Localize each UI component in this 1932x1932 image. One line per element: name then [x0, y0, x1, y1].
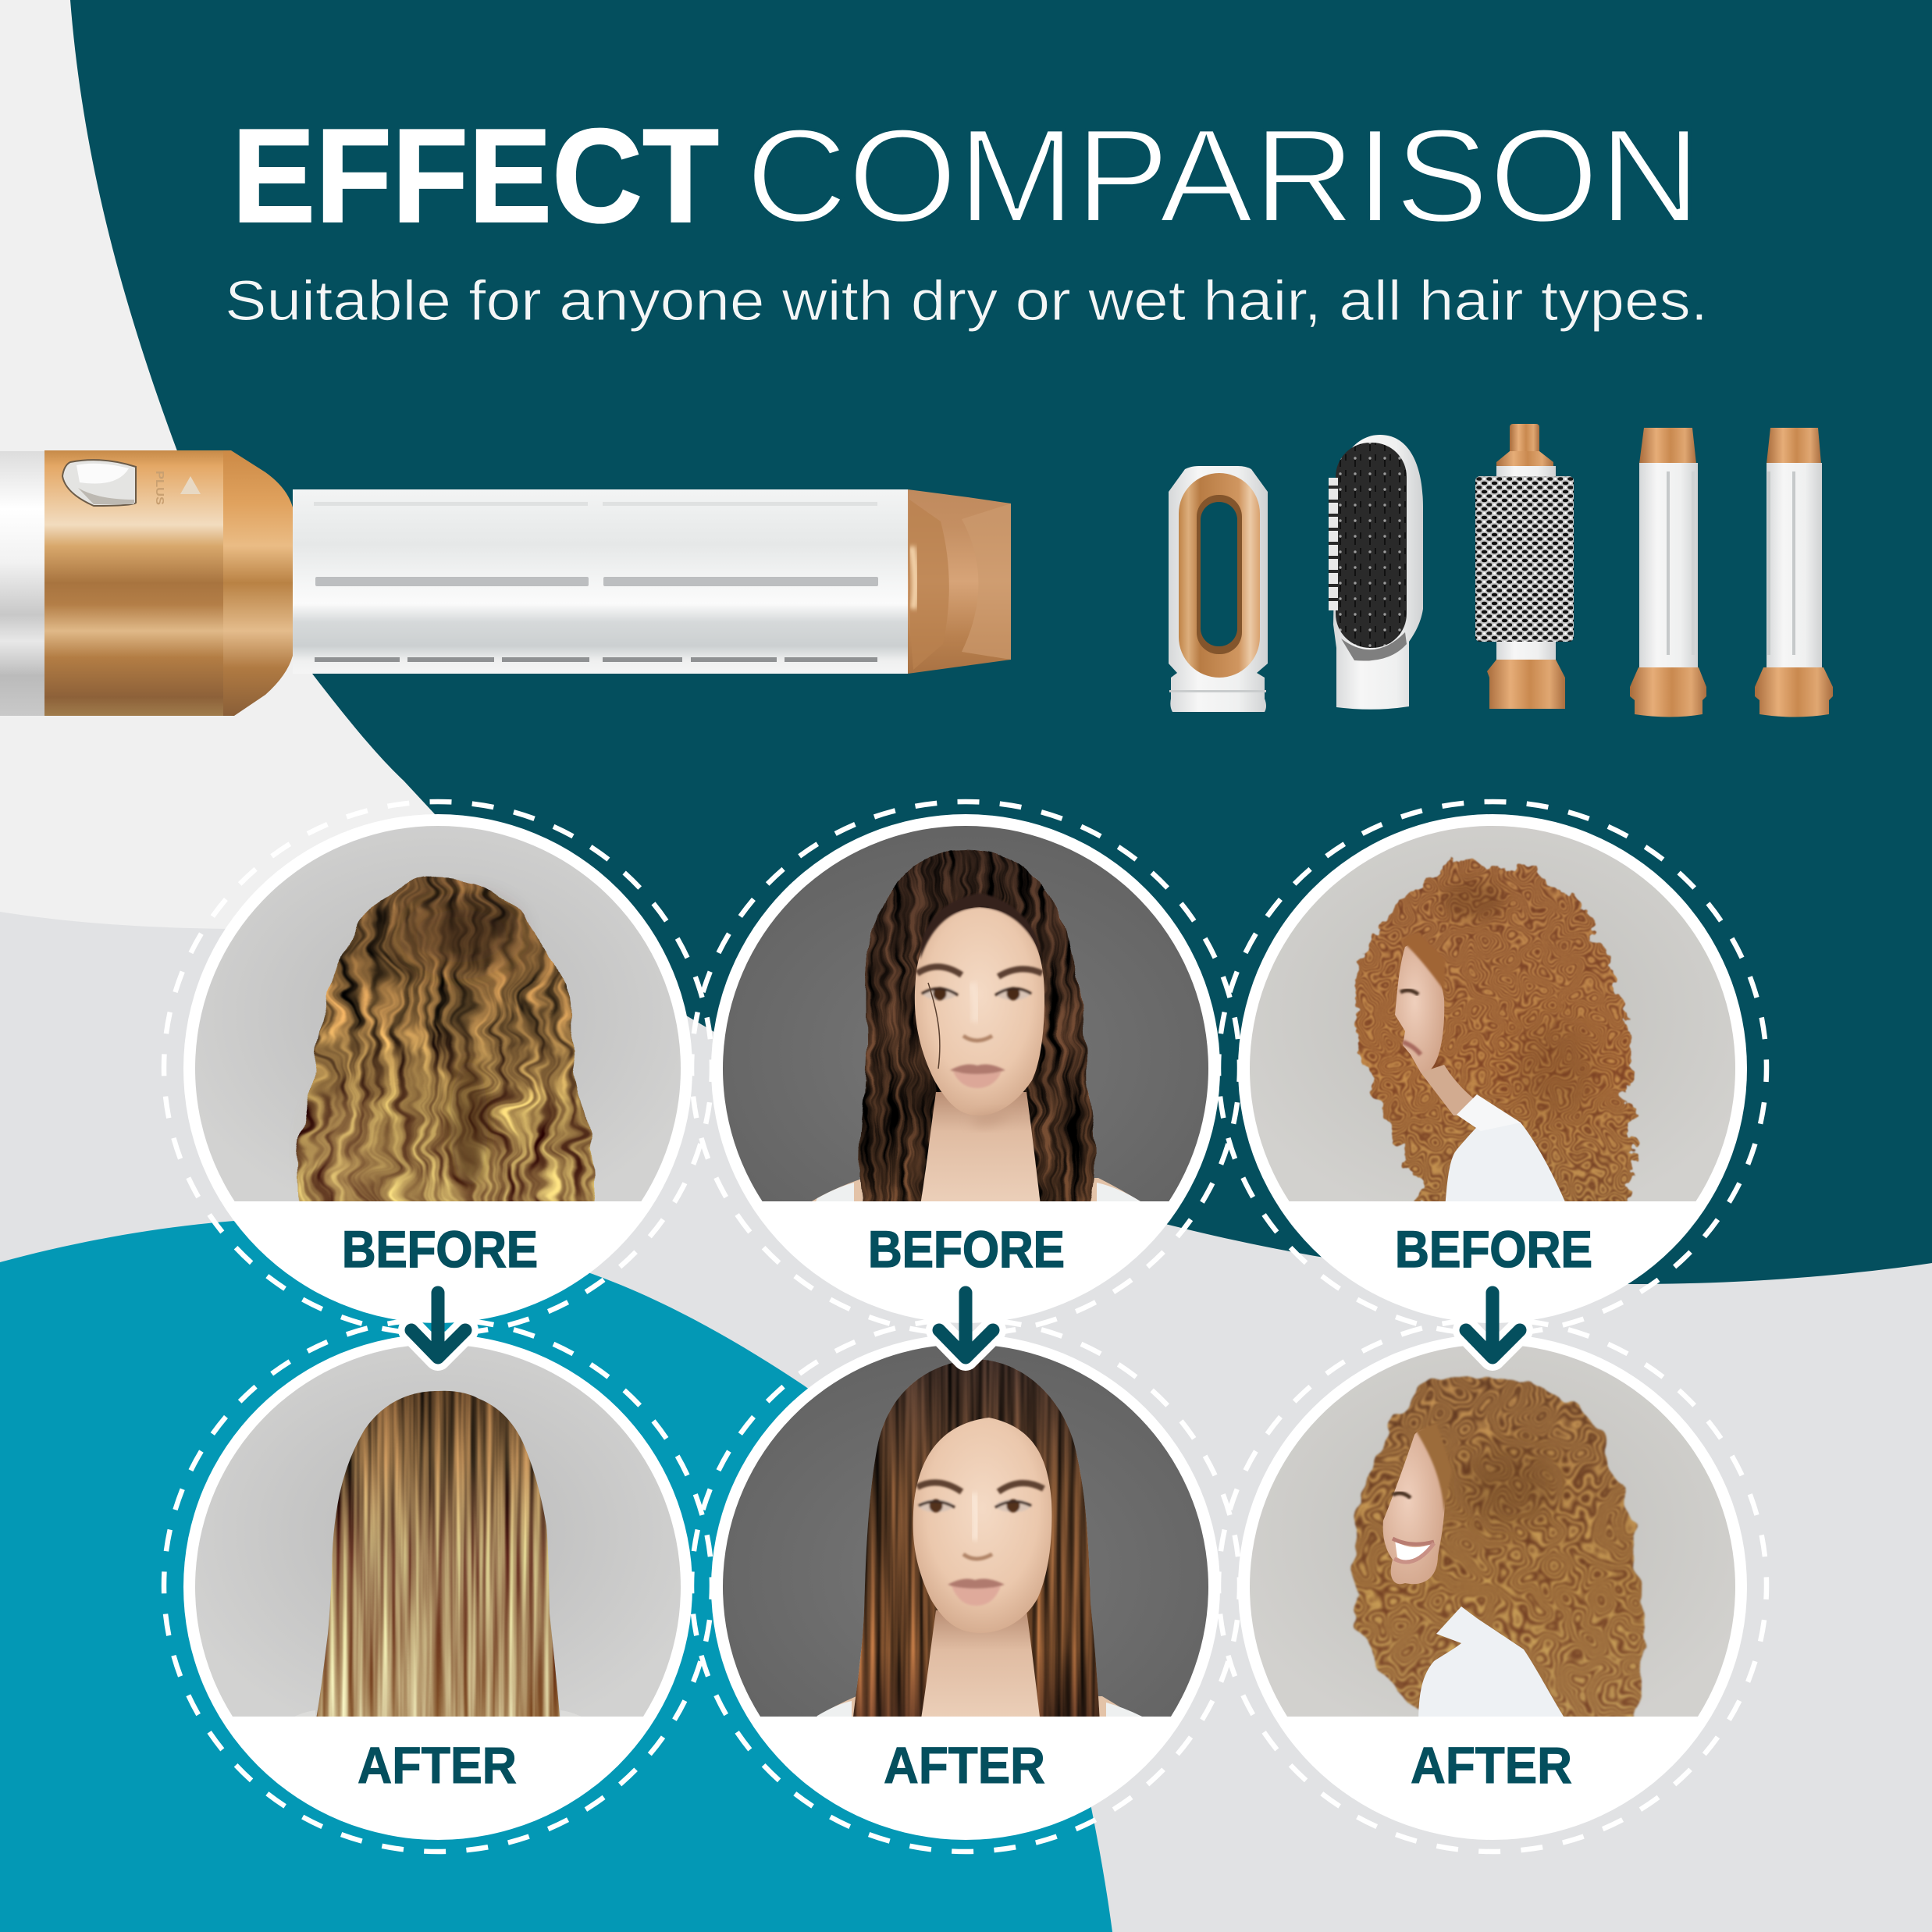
- label: BEFORE: BEFORE: [342, 1220, 538, 1278]
- title: [232, 101, 1701, 251]
- title: COMPARISON: [745, 101, 1701, 251]
- arrow: before to after, column 1: [411, 1293, 465, 1357]
- icon: triangle mark: [180, 476, 201, 494]
- photo: straight hair back: [188, 1337, 688, 1727]
- background: bright teal lower wave: [0, 1221, 1112, 1932]
- product: hair styler main unit: [0, 450, 1011, 716]
- subtitle: Suitable for anyone with dry or wet hair, all hair types.: [225, 270, 1708, 333]
- label: AFTER: AFTER: [358, 1736, 517, 1794]
- icon: collar switch: [62, 460, 136, 506]
- photo: wavy hair back: [188, 819, 688, 1209]
- product: attachment curling barrel right: [1755, 428, 1833, 717]
- product: attachment curling barrel left: [1630, 428, 1706, 717]
- background: dark teal header wave: [70, 0, 1932, 1284]
- panel: after 2, straight hair portrait: [711, 1334, 1220, 1840]
- panel: before 2, wet hair portrait: [711, 814, 1220, 1323]
- arrow: before to after, column 3: [1466, 1293, 1520, 1357]
- product: attachment paddle brush: [1329, 435, 1423, 710]
- arrow: before to after, column 2: [939, 1293, 993, 1357]
- panel: before 3, frizzy curls profile: [1238, 814, 1747, 1323]
- label: AFTER: AFTER: [884, 1736, 1045, 1794]
- decorative dashed rings: [164, 802, 1767, 1852]
- label: AFTER: AFTER: [1411, 1736, 1572, 1794]
- background: pale top-left area: [0, 0, 546, 929]
- photo: woman with defined curls: [1243, 1337, 1742, 1727]
- panel: before 1, wavy hair from behind: [183, 814, 692, 1323]
- label: BEFORE: BEFORE: [868, 1220, 1065, 1278]
- title: EFFECT: [232, 101, 719, 251]
- device label: rotated mark: PLUS: [153, 471, 166, 505]
- photo: woman with frizzy curls: [1243, 819, 1742, 1209]
- product: attachment round brush: [1475, 424, 1574, 709]
- photo: woman with wet hair: [716, 819, 1215, 1209]
- photo: woman with sleek straight hair: [716, 1337, 1215, 1727]
- panel: after 3, defined curls smiling profile: [1238, 1334, 1747, 1840]
- product: attachment concentrator: [1169, 466, 1268, 712]
- label: BEFORE: BEFORE: [1395, 1220, 1592, 1278]
- panel: after 1, straight hair from behind: [183, 1334, 692, 1840]
